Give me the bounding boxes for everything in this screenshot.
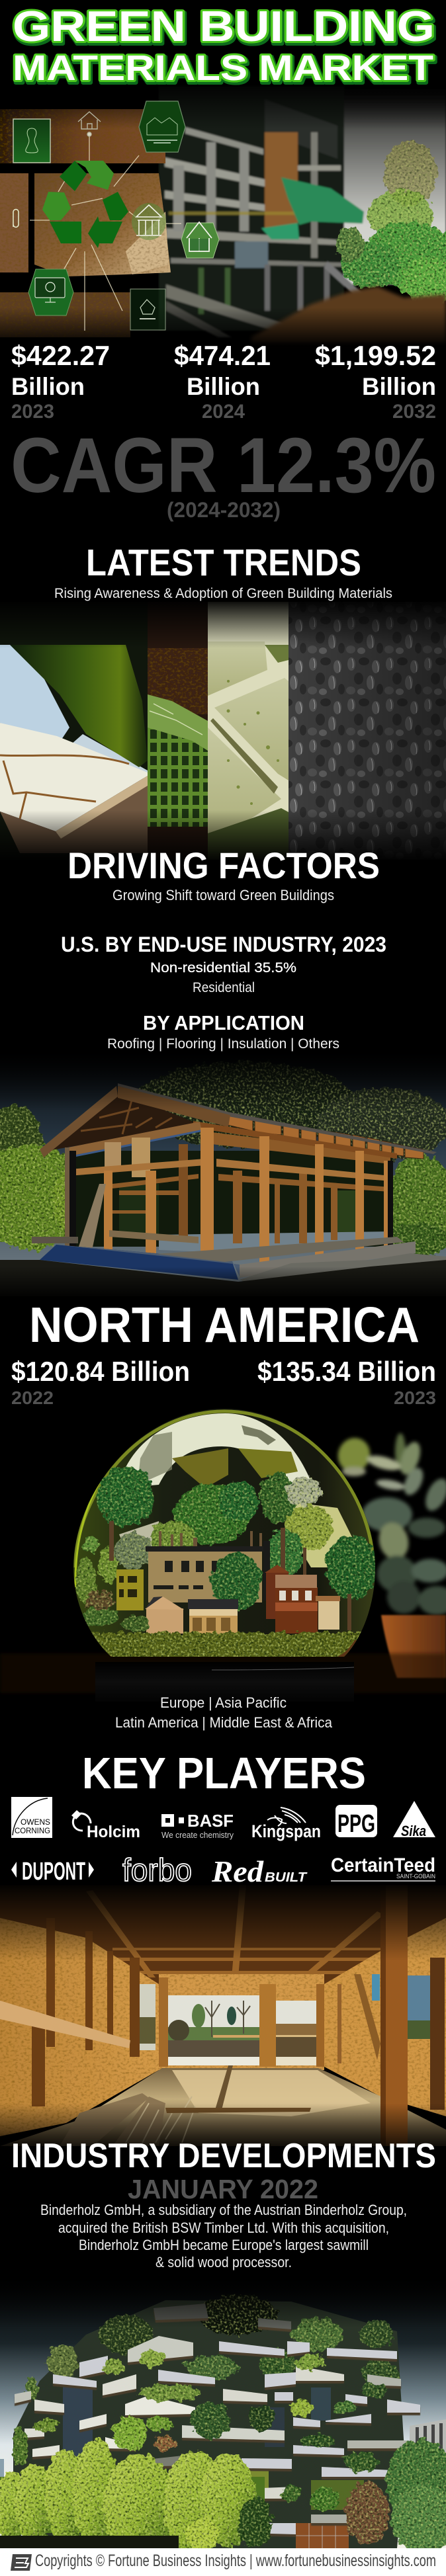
plant pot <box>381 1615 446 1678</box>
logo: Sika <box>393 1801 435 1839</box>
street fence shadow <box>0 2536 179 2548</box>
back wall <box>159 1974 324 2070</box>
logo: Kingspan: Kingspan <box>251 1821 321 1841</box>
house top fade <box>0 1052 446 1111</box>
gable underside <box>48 1091 199 1151</box>
heading and values: North America: $135.34 Billion <box>257 1356 436 1387</box>
dirt pile <box>251 286 446 344</box>
heading: driving factors: Growing Shift toward Green Buildings <box>112 887 334 903</box>
big post <box>380 1885 408 2146</box>
segment: U.S. by end-use industry <box>61 933 386 995</box>
rafter tails <box>225 1114 424 1159</box>
logo: Sika: Sika <box>401 1823 426 1839</box>
side windows <box>140 1984 156 2050</box>
timber blocks <box>0 109 171 337</box>
panel: white foam block and leaf <box>0 617 148 853</box>
panel: beige tiles <box>208 602 289 860</box>
balcony greenery <box>12 2350 387 2512</box>
plywood panels <box>105 1142 121 1171</box>
other regions list: Latin America | Middle East & Africa <box>115 1714 333 1731</box>
heading: key players: KEY PLAYERS <box>82 1749 366 1798</box>
market size 2032: 2032 <box>392 401 436 423</box>
house bottom fade <box>0 1267 446 1300</box>
heading: latest trends <box>54 542 392 601</box>
logo: RedBuilt: Red <box>211 1854 264 1888</box>
tan house <box>146 1608 183 1634</box>
footer bar <box>0 2548 446 2576</box>
segment: by application: BY APPLICATION <box>143 1011 304 1034</box>
back window with garden view <box>168 1995 259 2065</box>
heading: driving factors <box>67 845 380 903</box>
logo: Owens Corning <box>11 1797 52 1838</box>
tree trunks <box>109 1521 351 1630</box>
sky and trees <box>0 1052 446 1296</box>
hero top fade <box>0 79 446 129</box>
title <box>13 2 435 88</box>
heading: latest trends: Rising Awareness & Adoption of Green Building Materials <box>54 586 392 601</box>
icon: monitor hexagon <box>28 269 73 315</box>
right wall <box>324 1918 446 2116</box>
long pavilion <box>189 1616 238 1634</box>
logo: CertainTeed: SAINT-GOBAIN <box>396 1873 435 1880</box>
wall studs <box>32 1918 445 2110</box>
icon: rectangle badge with bulb <box>13 119 50 163</box>
heading and values: North America: NORTH AMERICA <box>29 1297 420 1352</box>
brown townhouse <box>266 1573 289 1619</box>
trends photo strip: four material panels <box>0 599 446 863</box>
market size 2032: $1,199.52 <box>315 340 436 371</box>
bowl rim shading <box>110 1640 357 1657</box>
development description: acquired the British BSW Timber Ltd. With this acquisition, <box>58 2220 389 2236</box>
market size 2023: $422.27 <box>11 340 110 371</box>
segment: by application <box>107 1011 339 1052</box>
leaning lumber <box>75 1184 106 1260</box>
logo: Holcim <box>71 1810 140 1841</box>
glass rim highlights <box>75 1411 373 1567</box>
segment: U.S. by end-use industry: Non-residential 35.5% <box>150 960 296 976</box>
market size 2024: Billion <box>187 373 260 400</box>
icon: paperclip <box>13 209 19 228</box>
tower core <box>13 2300 405 2548</box>
heading and values: North America: 2023 <box>394 1388 436 1408</box>
main brick building <box>148 1550 262 1602</box>
segment: U.S. by end-use industry: Residential <box>193 980 255 995</box>
market size 2032: Billion <box>362 373 436 400</box>
olive landmasses <box>172 1448 228 1488</box>
factory stacks <box>159 1531 262 1546</box>
globe body <box>69 1405 380 1661</box>
icon: hexagon house <box>181 222 219 258</box>
photo: vertical forest tower <box>0 2272 446 2559</box>
logo: BASF: We create chemistry <box>161 1830 234 1840</box>
CAGR figure: (2024-2032) <box>167 498 281 522</box>
market size 2023: 2023 <box>11 401 54 423</box>
trends bottom fade <box>0 810 446 863</box>
second window <box>276 2001 317 2065</box>
title: MATERIALS MARKET <box>13 48 433 88</box>
building and sky backdrop <box>159 86 446 337</box>
date: January 2022: JANUARY 2022 <box>128 2174 318 2204</box>
table shadow band <box>0 1653 446 1693</box>
icon: Fortune Business Insights logo <box>11 2554 32 2571</box>
other regions list <box>115 1694 333 1731</box>
street trees <box>0 2439 446 2559</box>
photo: timber frame house <box>0 1052 446 1300</box>
main beams <box>68 1159 205 1176</box>
logo: DuPont <box>11 1858 94 1886</box>
market size 2024: 2024 <box>202 401 245 423</box>
company logos <box>11 1797 435 1888</box>
icon: home <box>78 112 101 136</box>
logo: DuPont: DUPONT <box>22 1858 85 1886</box>
icon: hexagon chart badge <box>139 101 185 152</box>
photo: glass globe with miniature city <box>0 1405 446 1702</box>
sky <box>0 2275 446 2548</box>
logo: BASF: BASF <box>187 1811 234 1831</box>
ceiling <box>0 1885 446 2001</box>
lumber pile <box>60 2093 165 2146</box>
other regions list: Europe | Asia Pacific <box>160 1694 287 1711</box>
heading and values: North America <box>11 1297 436 1408</box>
tower top fade <box>0 2272 446 2328</box>
logo: CertainTeed: CertainTeed <box>331 1854 435 1876</box>
left wall <box>0 1918 159 2136</box>
logo: Holcim: Holcim <box>87 1823 140 1841</box>
distant tower left <box>0 2459 4 2477</box>
logo: Owens Corning: CORNING <box>15 1826 50 1835</box>
cream cottage <box>318 1599 339 1630</box>
right-side foliage <box>336 140 446 304</box>
icon: recycle badge <box>130 289 165 330</box>
interior bottom fade <box>0 2103 446 2156</box>
market size 2024: $474.21 <box>174 340 271 371</box>
logo: PPG <box>335 1805 377 1838</box>
market size 2023: Billion <box>11 373 85 400</box>
concrete balconies <box>15 2304 420 2534</box>
market size 2023 <box>11 340 110 423</box>
segment: by application: Roofing | Flooring | Insulation | Others <box>107 1036 339 1052</box>
logo: forbo: forbo <box>122 1853 192 1888</box>
diagonal braces <box>0 2001 130 2048</box>
market size 2032 <box>315 340 436 423</box>
development description <box>40 2202 407 2270</box>
house interior darkness <box>68 1151 392 1247</box>
development description: Binderholz GmbH became Europe's largest sawmill <box>79 2237 369 2253</box>
moss ground <box>82 1589 361 1657</box>
logo: RedBuilt: BUILT <box>265 1870 308 1885</box>
main posts <box>65 1128 393 1263</box>
logo: Kingspan <box>251 1807 321 1841</box>
title: GREEN BUILDING <box>13 2 435 50</box>
blurred plant and pot <box>334 1433 446 1615</box>
upper greenery <box>25 2295 399 2399</box>
segment: U.S. by end-use industry: U.S. BY END-USE INDUSTRY, 2023 <box>61 933 386 956</box>
roof surfaces <box>118 1083 437 1154</box>
logo: RedBuilt <box>211 1854 308 1888</box>
heading and values: North America: 2022 <box>11 1388 54 1408</box>
logo: BASF <box>161 1811 234 1840</box>
heading and values: North America: $120.84 Billion <box>11 1356 190 1387</box>
development description: & solid wood processor. <box>156 2254 292 2270</box>
logo: Owens Corning: OWENS <box>21 1817 50 1827</box>
yellow building <box>116 1569 144 1610</box>
hero photo: timber, recycle icons and building under construction <box>0 79 446 347</box>
pedestal <box>95 1662 354 1702</box>
miniature trees <box>75 1466 379 1604</box>
interior beams <box>109 1132 390 1243</box>
connector lines <box>30 136 181 331</box>
heading: driving factors: DRIVING FACTORS <box>67 845 380 886</box>
icon: pavilion <box>132 203 166 240</box>
upper light band of earth <box>118 1413 311 1488</box>
neighbouring building <box>410 2419 446 2487</box>
heading: latest trends: LATEST TRENDS <box>86 542 361 584</box>
front tree <box>211 1553 261 1611</box>
panel: dark pebble texture <box>289 602 446 860</box>
icon: large recycle symbol <box>42 161 128 248</box>
interior top fade <box>0 1882 446 1961</box>
photo: timber house interior <box>0 1882 446 2156</box>
hero bottom fade <box>0 308 446 347</box>
floor <box>0 2068 446 2146</box>
panel: green honeycomb <box>148 602 208 860</box>
foundation and tarp <box>40 1245 238 1280</box>
trends top fade <box>0 599 446 648</box>
logo: PPG: PPG <box>337 1810 375 1838</box>
market size 2024 <box>174 340 271 423</box>
